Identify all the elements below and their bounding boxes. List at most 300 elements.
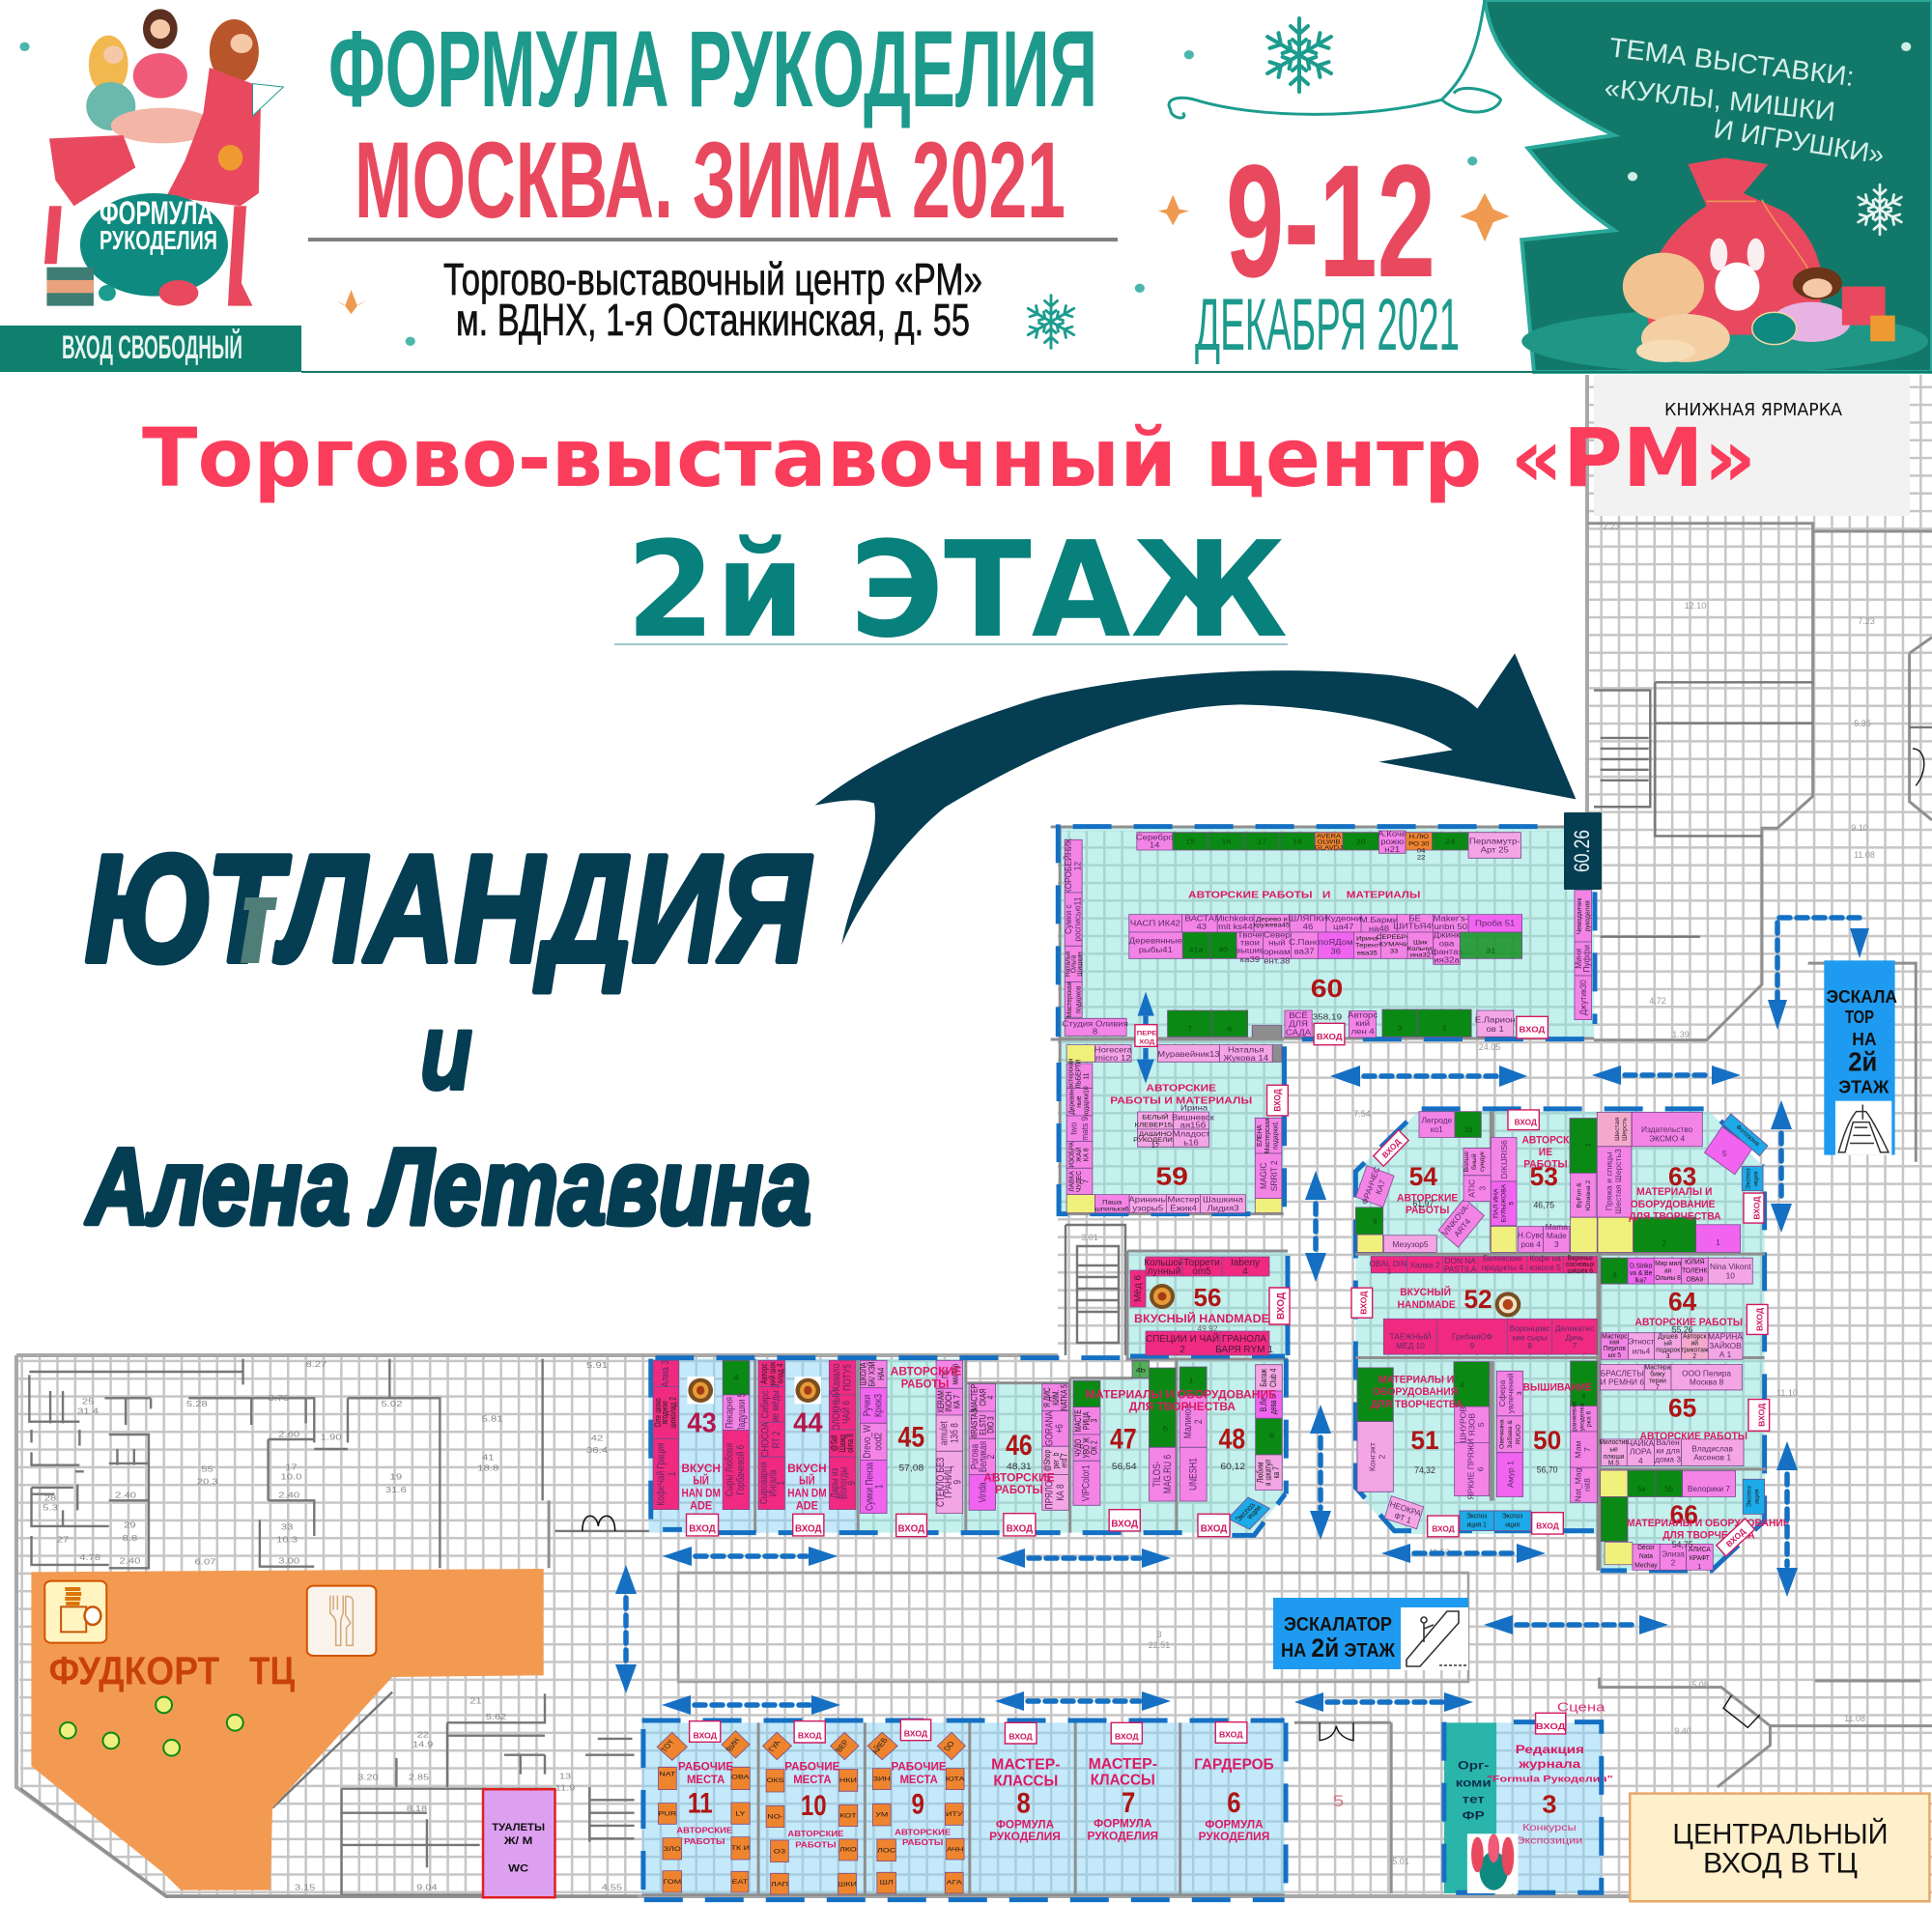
hall 9 work places: АГА	[947, 1879, 963, 1886]
hall 66 stalls: 5а	[1637, 1485, 1646, 1493]
hall 44 stalls: RT 2	[771, 1431, 782, 1448]
hall 66 title and number: ДЛЯ ТВОРЧЕСТВА	[1662, 1529, 1755, 1542]
banner: logo text on globe: ФОРМУЛА	[99, 195, 213, 232]
hall 63 stalls: ЭКСМО 4	[1649, 1134, 1685, 1144]
hall 64 stalls: ТОЛЕНК	[1682, 1267, 1708, 1274]
plan walls: under foodcourt: 22	[417, 1730, 429, 1740]
banner: theme text	[1603, 32, 1887, 170]
hall 56 stalls: 4	[1242, 1266, 1248, 1277]
arrow: route from escalator	[1768, 918, 1869, 1030]
hall 10 work places: ЛАП	[771, 1881, 788, 1888]
icon: escalator	[1406, 1611, 1466, 1666]
hall 10 work places: ГУА	[766, 1739, 783, 1753]
hall 47 stalls: VIPColor1	[1080, 1464, 1093, 1501]
hall 65 stalls: ые	[1609, 1447, 1618, 1454]
hall 63 stalls: 5	[1722, 1149, 1727, 1158]
hall 56	[1127, 1251, 1290, 1359]
hall 59 stalls: РУКОДЕЛИЕ	[1133, 1136, 1178, 1144]
hall 53 entrance: ВХОД	[1515, 1117, 1537, 1126]
hall 44 title and number: ЫЙ	[799, 1473, 815, 1488]
hall 64 title, number and area: 55,26	[1672, 1325, 1693, 1335]
hall 51 stalls: 4	[1460, 1380, 1464, 1390]
hall 63 stalls: 1	[1716, 1237, 1720, 1247]
hall 44 stalls: Вологды	[838, 1467, 850, 1499]
hall 43 title and number: ADE	[690, 1500, 712, 1513]
hall 60 stalls: Наталья	[1064, 952, 1072, 977]
hall 43 title and number: 43	[687, 1408, 717, 1438]
hall 65 stalls: ООО Пелира	[1682, 1368, 1731, 1378]
hall 64 stalls: lka7	[1635, 1278, 1647, 1285]
hall 60 stalls: КУМАЧИ	[1379, 941, 1409, 948]
hall 59 stalls: micro 12	[1095, 1054, 1131, 1063]
hall 64 stalls: Авторск	[1683, 1333, 1707, 1341]
hall 60 stalls: 33	[1390, 948, 1398, 955]
hall 60 stalls: OLWIB	[1317, 838, 1341, 845]
plan dimension labels: 11.08	[1854, 850, 1875, 860]
banner: tree shape and decorations	[19, 0, 1932, 374]
hall 59 stalls: 17	[1151, 1142, 1159, 1150]
hall 65 stalls: 7	[1656, 1384, 1660, 1391]
hall 64 title, number and area	[1635, 1287, 1743, 1335]
hall 60 stalls: Ольга	[1069, 955, 1078, 973]
plan dimension labels	[1149, 522, 1875, 1866]
hall 9 work places: ЛОС	[877, 1846, 896, 1854]
hall 64 entrance	[1747, 1304, 1768, 1334]
hall 64 stalls: 3	[1666, 1353, 1670, 1360]
hall 51 stalls: 6	[1475, 1466, 1485, 1471]
hall 47 number and area: 56,54	[1112, 1463, 1137, 1471]
plan walls: lower left: 6.07	[195, 1557, 216, 1567]
arrow: horizontal under hall 46	[996, 1548, 1171, 1568]
hall 59 stalls: Мастерская	[1264, 1118, 1271, 1153]
hall 60 stalls: 22	[1417, 854, 1425, 861]
hall 66 stalls: 5b	[1664, 1485, 1673, 1493]
hall 59 stalls: Паша	[1102, 1199, 1122, 1206]
hall 43 title and number: ВКУСН	[681, 1463, 721, 1475]
hall 64 title, number and area: 64	[1668, 1287, 1696, 1316]
hall 60 stalls: ка39	[1240, 955, 1260, 964]
hall 9 title and number: РАБОТЫ	[902, 1838, 943, 1848]
hall 52 stalls	[1370, 1254, 1597, 1354]
hall 45 stalls: НА4	[876, 1367, 886, 1380]
hall 63 stalls: 2	[1662, 1239, 1666, 1248]
hall 63 title and number: ДЛЯ ТВОРЧЕСТВА	[1629, 1210, 1721, 1223]
hall 45 title, number and area: АВТОРСКИЕ	[891, 1365, 962, 1378]
hall 9 work places: ШЛ	[880, 1879, 894, 1886]
hall 45 stalls: INOCH	[944, 1391, 953, 1412]
hall 50 stalls: Амур 1	[1506, 1461, 1516, 1488]
hall 46 stalls: MIRASTAS	[969, 1408, 980, 1441]
hall 60 stalls: кий	[1355, 1019, 1370, 1028]
halls 50 to 54 and 63 to 66	[1351, 1109, 1790, 1571]
hall 60 stalls: 2	[1442, 1024, 1447, 1033]
hall 59 stalls: SRRIT 2	[1268, 1160, 1279, 1191]
hall 10 work places: NO-	[767, 1813, 783, 1820]
banner: title line two: МОСКВА. ЗИМА 2021	[355, 120, 1065, 241]
hall 60 stalls: рукоделия	[1583, 900, 1592, 931]
plan walls: under foodcourt	[20, 1692, 638, 1896]
plan dimension labels: 7.54	[1353, 1109, 1371, 1119]
hall 43 stalls: КофеЧай Грация	[654, 1442, 668, 1506]
hall 60 title	[1188, 890, 1420, 900]
hall 46 stalls: СКАЯ	[978, 1389, 988, 1406]
hall 64 stalls: Мастерс	[1602, 1333, 1628, 1341]
hall 10 title and number: 10	[801, 1791, 827, 1822]
hall 66 stalls: КРАФТ	[1690, 1555, 1710, 1562]
hall 60 stalls: Кудеони	[1325, 914, 1361, 923]
arrow: horizontal above hall 63	[1592, 1065, 1741, 1085]
hall 60 stalls: н21	[1384, 845, 1400, 854]
hall 60 stalls: 8	[1093, 1027, 1097, 1037]
hall 60 stalls: ВАСТА	[1185, 914, 1214, 923]
badge: hall 60 area	[1564, 812, 1602, 890]
hall 11 title and number: 11	[688, 1788, 713, 1819]
hall 64 stalls: ЗАЙКОВ	[1709, 1340, 1742, 1350]
arrow: horizontal right of escalator	[1484, 1615, 1668, 1634]
hall 60 entrances	[1314, 1016, 1548, 1045]
hall 46 title, number and area	[983, 1430, 1055, 1496]
hall 65 entrance: ВХОД	[1756, 1404, 1766, 1427]
hall 60 title: И	[1322, 890, 1330, 900]
hall 44 stalls: кий шок	[767, 1362, 778, 1385]
hall 54 stalls: Волше	[1463, 1151, 1470, 1172]
hall 10 work places: НКИ	[839, 1776, 857, 1784]
hall 56 stalls	[1130, 1257, 1273, 1355]
hall 63 entrance: ВХОД	[1751, 1196, 1761, 1220]
plan walls: under foodcourt: 5.62	[486, 1713, 506, 1722]
hall 54 stalls: ФРАНЧЕС	[1359, 1165, 1381, 1206]
hall 60 area: 358,19	[1313, 1012, 1342, 1021]
hall 44 stalls: Сибирс	[758, 1391, 772, 1418]
hall 56 title: ВКУСНЫЙ HANDMADE	[1134, 1311, 1269, 1325]
hall 66 stalls: Décor	[1637, 1545, 1656, 1551]
hall 59 stalls: Шашкина	[1203, 1195, 1243, 1204]
hall 50 stalls: Nat_Mag	[1574, 1467, 1583, 1502]
banner: venue address: Торгово-выставочный центр «РМ»	[443, 254, 982, 304]
banner: three women with globe illustration	[44, 9, 283, 306]
hall 47 stalls	[1073, 1360, 1176, 1505]
hall 47 stalls: ОК 2	[1090, 1440, 1099, 1455]
banner: title line one: ФОРМУЛА РУКОДЕЛИЯ	[328, 9, 1097, 129]
hall 53 stalls: Н.Суво	[1518, 1230, 1545, 1240]
hall 45 stalls: СТЕКЛО БЕЗ	[935, 1458, 947, 1507]
hall 48 stalls: ка 7	[1271, 1466, 1281, 1478]
hall 44 stalls: Ингала	[767, 1469, 780, 1496]
hall 8 labels: ФОРМУЛА	[996, 1818, 1054, 1832]
plan walls: lower left: 19	[390, 1473, 403, 1482]
hall 60 stalls: 31	[1487, 947, 1496, 955]
hall 60 stalls: ШИТЬЯ49	[1393, 922, 1436, 930]
hall 63 title and number: 63	[1668, 1162, 1696, 1191]
hall 45 stalls: Крюк3	[872, 1394, 885, 1417]
hall 66 stalls: Велорики 7	[1688, 1484, 1730, 1493]
heading: second floor: 2й ЭТАЖ	[626, 514, 1288, 668]
arrow: vertical between 48 and 51	[1310, 1405, 1331, 1540]
plan walls: lower left: 55	[201, 1464, 213, 1474]
plan dimension labels: 22.51	[1149, 1640, 1170, 1650]
hall 54 title, number and area	[1397, 1162, 1458, 1216]
hall 60 stalls: поЯДом	[1319, 938, 1353, 947]
hall 52 title and number: HANDMADE	[1398, 1299, 1456, 1311]
plan walls: lower left: 3.78	[268, 1394, 290, 1404]
hall 46 title, number and area: РАБОТЫ	[995, 1484, 1043, 1496]
hall 59 stalls: ЕЛЕНА	[1255, 1124, 1264, 1147]
banner: free entry band	[0, 326, 301, 372]
hall 9 work places	[867, 1732, 965, 1893]
hall 50 stalls: увлечений	[1506, 1373, 1516, 1413]
hall 53 stalls: DIKIJRIS6	[1499, 1140, 1509, 1179]
hall 60 stalls: ия32а	[1434, 955, 1460, 965]
food court label: ФУДКОРТ	[49, 1648, 219, 1692]
halls 47 and 48 shared title: ДЛЯ ТВОРЧЕСТВА	[1129, 1401, 1236, 1413]
hall 60 stalls: ина32	[1410, 952, 1431, 959]
hall 60 stalls: 17	[1258, 838, 1267, 845]
hall 52 stalls: кокосе 5	[1529, 1263, 1561, 1272]
hall 46 stalls: NATKA 5	[1059, 1384, 1069, 1410]
hall 48 stalls: UNESH1	[1187, 1458, 1200, 1491]
plan dimension labels: 5.35	[1854, 719, 1871, 728]
hall 51 stalls: Конгэкт	[1367, 1442, 1377, 1471]
halls 11 to 6	[642, 1719, 1286, 1900]
badge: hall 60 area: 60.26	[1570, 830, 1594, 872]
hall 44 stalls: ЧАЙ 6	[838, 1401, 853, 1424]
hall 59 stalls: подарки1	[1271, 1122, 1280, 1150]
plan walls: lower left: 20.3	[197, 1478, 218, 1487]
halls 60 and 59	[1051, 824, 1595, 1214]
hall 60 stalls: ца47	[1333, 923, 1353, 931]
hall 45 stalls: amulet	[938, 1421, 951, 1445]
hall 52 stalls: сосновых	[1566, 1262, 1595, 1268]
hall 54 stalls: 3	[1477, 1186, 1487, 1191]
banner: theme text: ТЕМА ВЫСТАВКИ:	[1607, 32, 1856, 92]
hall 59 entrance: ВХОД	[1272, 1089, 1283, 1112]
heading: venue name: Торгово-выставочный центр «РМ»	[142, 411, 1756, 505]
icon: fork and knife	[307, 1586, 376, 1656]
plan walls: under foodcourt: 8.18	[407, 1804, 428, 1814]
halls 43 to 48 entrances: ВХОД	[795, 1523, 822, 1534]
hall 44 title and number: ВКУСН	[787, 1463, 827, 1475]
hall 59 stalls: Ёжик4	[1170, 1204, 1197, 1212]
hall 45 stalls: мастер	[951, 1363, 960, 1385]
hall 60 stalls: Дерево и	[1256, 916, 1288, 923]
hall 44 stalls: @Sdl	[830, 1435, 839, 1451]
hall 3 entrance	[1536, 1713, 1566, 1734]
hall 64 stalls: ых 5	[1607, 1352, 1621, 1359]
arrow: vertical between 59 and 54	[1305, 1171, 1326, 1282]
hall 51 stalls: 5	[1476, 1422, 1486, 1427]
hall 44 stalls: кие мёды 3	[770, 1383, 781, 1426]
arrow: horizontal under hall 51	[1381, 1544, 1546, 1563]
panel: escalator to 2nd floor	[1273, 1598, 1468, 1670]
hall 60 stalls: Сумки с	[1064, 904, 1073, 934]
hall 63 stalls: Шестая Шерсть3	[1613, 1149, 1623, 1214]
hall 60 stalls: ов 1	[1486, 1025, 1504, 1034]
hall 52 stalls: Деликатес	[1555, 1323, 1595, 1333]
plan walls: lower left: 2.40	[119, 1556, 141, 1566]
hall 59 stalls: Лидия3	[1207, 1204, 1239, 1212]
hall 46 stalls: DIO 3	[986, 1416, 996, 1434]
hall 44 stalls: олад 4	[776, 1363, 785, 1383]
passage between halls 60 and 59	[1135, 1025, 1157, 1046]
banner: dates: 9-12	[1226, 132, 1435, 311]
hall 46 stalls	[969, 1384, 1069, 1510]
hall 9 work places: DO	[942, 1740, 956, 1752]
plan dimension labels: 5.08	[1691, 1680, 1709, 1690]
hall 9 title and number: РАБОЧИЕ	[892, 1761, 947, 1774]
hall 64 stalls: подарок	[1656, 1347, 1680, 1353]
hall 43 stalls: Горбачевой 6	[734, 1444, 748, 1495]
hall 60 stalls: ный	[1268, 938, 1286, 948]
plan dimension labels: 7.23	[1858, 616, 1875, 626]
hall 50 title, number and area: 50	[1533, 1426, 1561, 1455]
banner: bottom rule	[301, 371, 1932, 373]
plan walls: under foodcourt: 3.15	[295, 1884, 316, 1892]
hall 59 stalls: 11	[1082, 1073, 1091, 1079]
hall 7 labels: КЛАССЫ	[1091, 1772, 1155, 1788]
hall 63 stalls: Шерсть	[1621, 1117, 1628, 1141]
halls 43 to 48 background	[648, 1358, 1286, 1535]
panel: central entrance: ВХОД В ТЦ	[1703, 1848, 1858, 1879]
halls 47 and 48 shared title: МАТЕРИАЛЫ И ОБОРУДОВАНИЕ	[1086, 1388, 1277, 1402]
hall 53 title, number and area: 46,75	[1533, 1200, 1554, 1210]
hall 47 stalls: 5	[1163, 1425, 1168, 1433]
panel: vertical escalator: 2й	[1848, 1046, 1877, 1076]
arrow: horizontal above hall 54	[1330, 1065, 1527, 1087]
hall 59 stalls: mats 9	[1079, 1117, 1090, 1141]
plan walls: stairs beside hall 56	[1065, 1225, 1214, 1355]
hall 59 stalls: Муравейник13	[1157, 1050, 1220, 1059]
hall 45 stalls: КА 7	[952, 1395, 962, 1408]
hall 60 stalls: рожю	[1380, 838, 1405, 846]
hall 50 stalls: Сфера	[1497, 1379, 1507, 1406]
hall 60 stalls: Перламутр-	[1469, 837, 1520, 845]
hall 63 stalls: Фотозона	[1734, 1123, 1761, 1148]
hall 51 stalls: ЯЗОВ	[1467, 1413, 1477, 1436]
hall 60 stalls: Michkokot	[1214, 914, 1257, 923]
hall 50 title, number and area	[1523, 1381, 1592, 1474]
hall 52 stalls: Воронцовс	[1510, 1323, 1550, 1333]
hall 10 title and number: АВТОРСКИЕ	[787, 1830, 844, 1839]
arrow: vertical left of hall 11	[615, 1565, 637, 1693]
hall 60 stalls: 43	[1196, 923, 1207, 931]
hall 46 stalls: МАСТЕР	[969, 1384, 980, 1410]
hall 66 stalls: 1	[1697, 1564, 1701, 1571]
plan walls: lower left: 2.60	[278, 1430, 300, 1439]
hall 8 labels: 8	[1016, 1788, 1031, 1819]
hall 54 stalls: 6	[1373, 1217, 1377, 1226]
hall 59 stalls: 7	[1082, 1179, 1091, 1183]
panel: toilets: ТУАЛЕТЫ	[492, 1821, 545, 1833]
hall 60 stalls: Пуффи	[1581, 945, 1592, 973]
hall 60 stalls: подарков	[1074, 985, 1082, 1013]
hall 60 stalls: Проба 51	[1475, 919, 1515, 928]
hall 45 title, number and area	[891, 1365, 962, 1473]
panel: organising committee: коми	[1456, 1776, 1492, 1789]
plan walls: under foodcourt: 2.85	[409, 1774, 430, 1782]
hall 52 stalls: 7	[1573, 1341, 1577, 1350]
hall 44 stalls: CHOCOA	[759, 1422, 772, 1458]
plan walls: lower right	[1294, 1678, 1932, 1893]
plan dimension labels: 24.05	[1479, 1042, 1500, 1052]
hall 7 labels: ФОРМУЛА	[1094, 1818, 1151, 1831]
hall 46 stalls: ELSTU	[978, 1414, 988, 1435]
hall 56 stalls: Торрети	[1183, 1258, 1220, 1268]
hall 60 stalls: ева35	[1357, 950, 1378, 957]
hall 59 stalls: Horecera	[1094, 1045, 1132, 1054]
hall 9 work places: УМ	[875, 1811, 888, 1818]
hall 48 stalls: 6	[1269, 1432, 1275, 1439]
hall 63 title and number: МАТЕРИАЛЫ И	[1636, 1186, 1712, 1198]
hall 10 work places: ОКS	[766, 1776, 784, 1784]
hall 50 stalls	[1496, 1361, 1597, 1502]
hall 52 stalls: продукты 4	[1482, 1263, 1523, 1272]
hall 59 stalls: ЧУДЕС	[1075, 1171, 1083, 1192]
hall 9 work places: АЙЕВ	[869, 1737, 890, 1755]
hall 66 stalls: иция	[1754, 1489, 1761, 1504]
plan walls: lower left: 5.28	[186, 1400, 208, 1409]
hall 60 stalls: ент.38	[1264, 956, 1290, 965]
hall 52 entrance	[1351, 1288, 1373, 1318]
plan walls: lower left: 5.02	[382, 1400, 403, 1409]
hall 63 entrance	[1744, 1193, 1764, 1223]
hall 60 stalls: Мастерская	[1065, 982, 1073, 1017]
hall 59 stalls: Аринины	[1128, 1195, 1167, 1204]
book fair panel: КНИЖНАЯ ЯРМАРКА	[1664, 400, 1843, 420]
hall 52 stalls: кие сыры	[1513, 1332, 1548, 1343]
exhibitor name: Алена Летавина: Алена Летавина	[85, 1126, 811, 1247]
hall 60 stalls: ШЛЯПКИ	[1288, 914, 1328, 923]
block background	[1355, 1109, 1766, 1571]
hall 53 title, number and area: ИЕ	[1539, 1147, 1552, 1158]
hall 64 stalls: 10	[1726, 1270, 1735, 1281]
hall 46 stalls: Я ДИС	[1042, 1387, 1052, 1407]
hall 53 title, number and area: АВТОРСК	[1521, 1134, 1570, 1146]
hall 56 stalls: Iabeny	[1231, 1258, 1260, 1268]
hall 60 stalls: Север	[1264, 930, 1291, 940]
hall 52 stalls: PASTILA	[1444, 1264, 1477, 1273]
hall 65 stalls: Москва 8	[1690, 1378, 1724, 1387]
hall 64 stalls: кая	[1609, 1340, 1620, 1347]
hall 60 stalls: 16	[1222, 838, 1232, 845]
hall 65 title and number: 65	[1668, 1393, 1696, 1423]
plan walls: lower left	[29, 1359, 649, 1568]
arrow: horizontal above hall 3	[1294, 1692, 1473, 1712]
hall 59 stalls: БЕЛЫЙ	[1142, 1113, 1169, 1121]
hall 59 stalls: ные	[1075, 1096, 1083, 1108]
hall 48 stalls: В.Ле	[1259, 1397, 1268, 1411]
hall 6 labels: ГАРДЕРОБ	[1194, 1756, 1274, 1773]
hall 64 stalls: Nina Vikont	[1710, 1262, 1751, 1271]
hall 59 entrance	[1267, 1085, 1288, 1116]
hall 52 stalls: Варенье	[1567, 1255, 1593, 1262]
hall 3 and organising committee	[1444, 1700, 1929, 1901]
hall 60 stalls: Джутик30	[1577, 980, 1588, 1015]
hall 51 stalls	[1357, 1362, 1531, 1531]
hall 44 title and number: 44	[793, 1408, 823, 1438]
hall 66 entrance	[1717, 1519, 1754, 1556]
hall 59 stalls: Деревян	[1067, 1089, 1076, 1115]
hall 54 stalls: Мезузор5	[1392, 1239, 1429, 1249]
hall 60 stalls	[1062, 830, 1592, 1038]
arrows: visitor route	[615, 918, 1869, 1715]
hall 8 labels: МАСТЕР-	[991, 1756, 1061, 1773]
hall 50 stalls: 7	[1582, 1447, 1592, 1452]
plan dimension labels: 9.10	[1851, 823, 1868, 833]
hall 45 stalls: XERAM	[936, 1390, 946, 1413]
hall 46 title, number and area: АВТОРСКИЕ	[983, 1471, 1055, 1485]
hall 53 stalls: Made	[1547, 1231, 1567, 1240]
hall 59 stalls: Младост	[1173, 1129, 1210, 1138]
